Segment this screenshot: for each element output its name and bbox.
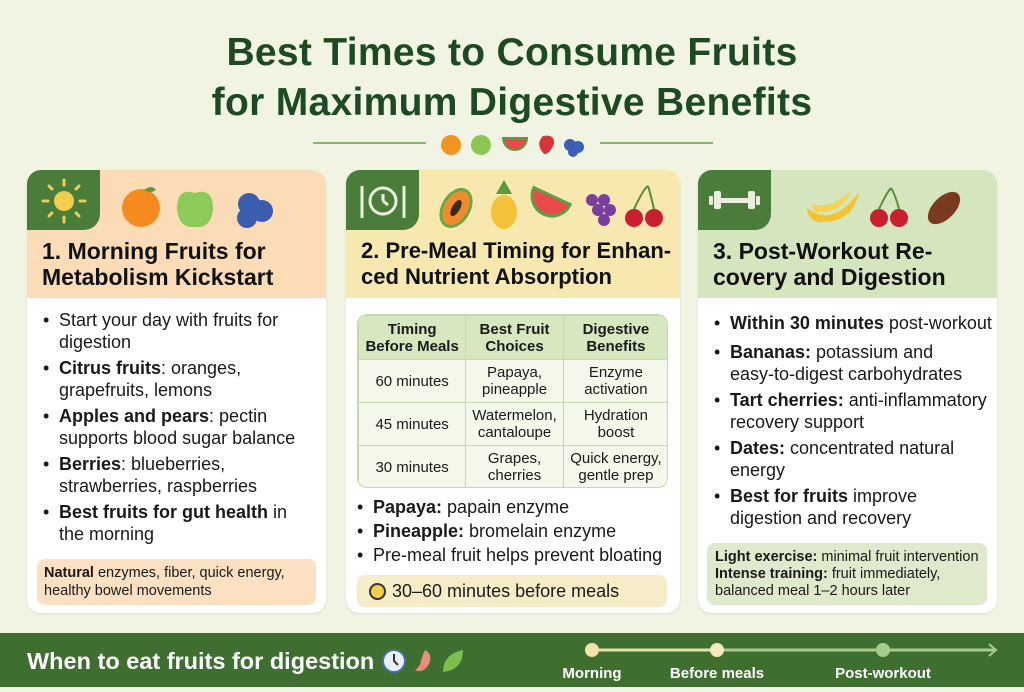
table pre-meal: 60 minutes	[375, 372, 449, 390]
bullets post-workout: Tart cherries: anti-inflammatory	[730, 390, 987, 410]
icon: dumbbell	[698, 170, 771, 230]
bullets post-workout: Bananas: potassium and	[730, 342, 933, 362]
bullets pre-meal	[358, 497, 662, 565]
table pre-meal: Timing	[388, 320, 437, 338]
table pre-meal: 30 minutes	[375, 458, 449, 476]
table pre-meal: boost	[598, 424, 634, 441]
callout post-workout: Light exercise: minimal fruit intervention	[715, 549, 979, 565]
bullets post-workout: Within 30 minutes post-workout	[730, 313, 992, 333]
header pre-meal	[346, 170, 680, 298]
table pre-meal: Hydration	[584, 407, 648, 424]
table pre-meal: Benefits	[586, 338, 646, 354]
table pre-meal: cherries	[488, 467, 541, 484]
icons: papaya pineapple watermelon grapes cherries	[440, 180, 663, 229]
table pre-meal: Quick energy,	[570, 450, 662, 467]
timeline: Morning	[562, 665, 622, 682]
table pre-meal	[357, 314, 668, 488]
title	[212, 31, 812, 124]
panel: morning fruits	[27, 170, 326, 613]
panel: post-workout	[698, 170, 997, 613]
bullets morning: Start your day with fruits for digestion	[59, 310, 278, 352]
timeline: Post-workout	[835, 665, 931, 682]
bottom bar	[0, 633, 1024, 687]
heading post-workout: covery and Digestion	[713, 264, 946, 290]
title: Best Times to Consume Fruits	[226, 31, 798, 74]
bottom heading: When to eat fruits for digestion	[27, 648, 374, 674]
callout: 30-60 minutes: 30–60 minutes before meals	[392, 581, 619, 601]
heading morning	[42, 238, 274, 290]
callout morning: Natural enzymes, fiber, quick energy, healthy bowel movements	[44, 565, 285, 599]
table pre-meal: Watermelon,	[472, 407, 557, 424]
table pre-meal: Papaya,	[487, 364, 542, 381]
table pre-meal: cantaloupe	[478, 424, 551, 441]
fruit divider icons	[313, 135, 713, 157]
icons: banana cherries date	[807, 187, 960, 227]
table pre-meal: gentle prep	[578, 467, 653, 484]
heading post-workout: 3. Post-Workout Re-	[713, 238, 932, 264]
icons: orange apple blueberries	[122, 187, 273, 228]
bullets pre-meal: Papaya: papain enzyme	[373, 497, 569, 517]
table pre-meal: pineapple	[482, 381, 547, 398]
panel: pre-meal	[346, 170, 680, 613]
bullets morning	[44, 310, 295, 544]
table pre-meal: activation	[584, 381, 648, 398]
icon: sun	[27, 170, 100, 230]
table pre-meal: Before Meals	[365, 338, 459, 354]
bullets post-workout: energy	[730, 460, 785, 480]
bullets morning: Berries: blueberries, strawberries, raspberries	[59, 454, 257, 496]
table pre-meal: 45 minutes	[375, 416, 449, 432]
title: for Maximum Digestive Benefits	[212, 81, 812, 124]
table pre-meal: Choices	[485, 338, 544, 354]
bullets morning: Citrus fruits: oranges, grapefruits, lemons	[59, 358, 241, 400]
heading pre-meal	[361, 238, 671, 289]
bullets post-workout	[714, 313, 992, 528]
table pre-meal: Digestive	[583, 320, 649, 338]
bullets post-workout: digestion and recovery	[730, 508, 911, 528]
callout post-workout	[707, 543, 987, 605]
bullets post-workout: Dates: concentrated natural	[730, 438, 954, 458]
header morning	[27, 170, 326, 298]
heading post-workout	[713, 238, 946, 290]
heading pre-meal: 2. Pre-Meal Timing for Enhan-	[361, 238, 671, 263]
bullets morning: Best fruits for gut health in the morning	[59, 502, 287, 544]
table pre-meal: Grapes,	[488, 450, 541, 467]
heading morning: 1. Morning Fruits for	[42, 238, 266, 264]
heading morning: Metabolism Kickstart	[42, 264, 273, 290]
icons: clock stomach leaf	[382, 649, 463, 673]
table pre-meal: Enzyme	[589, 364, 643, 381]
heading pre-meal: ced Nutrient Absorption	[361, 264, 612, 289]
icon: plate clock	[346, 170, 419, 230]
bullets post-workout: Best for fruits improve	[730, 486, 917, 506]
bullets morning: Apples and pears: pectin supports blood sugar balance	[59, 406, 295, 448]
header post-workout	[698, 170, 997, 298]
bullets post-workout: recovery support	[730, 412, 864, 432]
table pre-meal: Best Fruit	[480, 320, 550, 338]
timeline	[562, 643, 998, 682]
callout post-workout: Intense training: fruit immediately, balanced meal 1–2 hours later	[715, 566, 940, 599]
bullets pre-meal: Pre-meal fruit helps prevent bloating	[373, 545, 662, 565]
bullets post-workout: easy-to-digest carbohydrates	[730, 364, 962, 384]
bullets pre-meal: Pineapple: bromelain enzyme	[373, 521, 616, 541]
callout morning	[37, 559, 316, 605]
timeline: Before meals	[670, 665, 764, 682]
callout: 30-60 minutes	[357, 575, 667, 607]
